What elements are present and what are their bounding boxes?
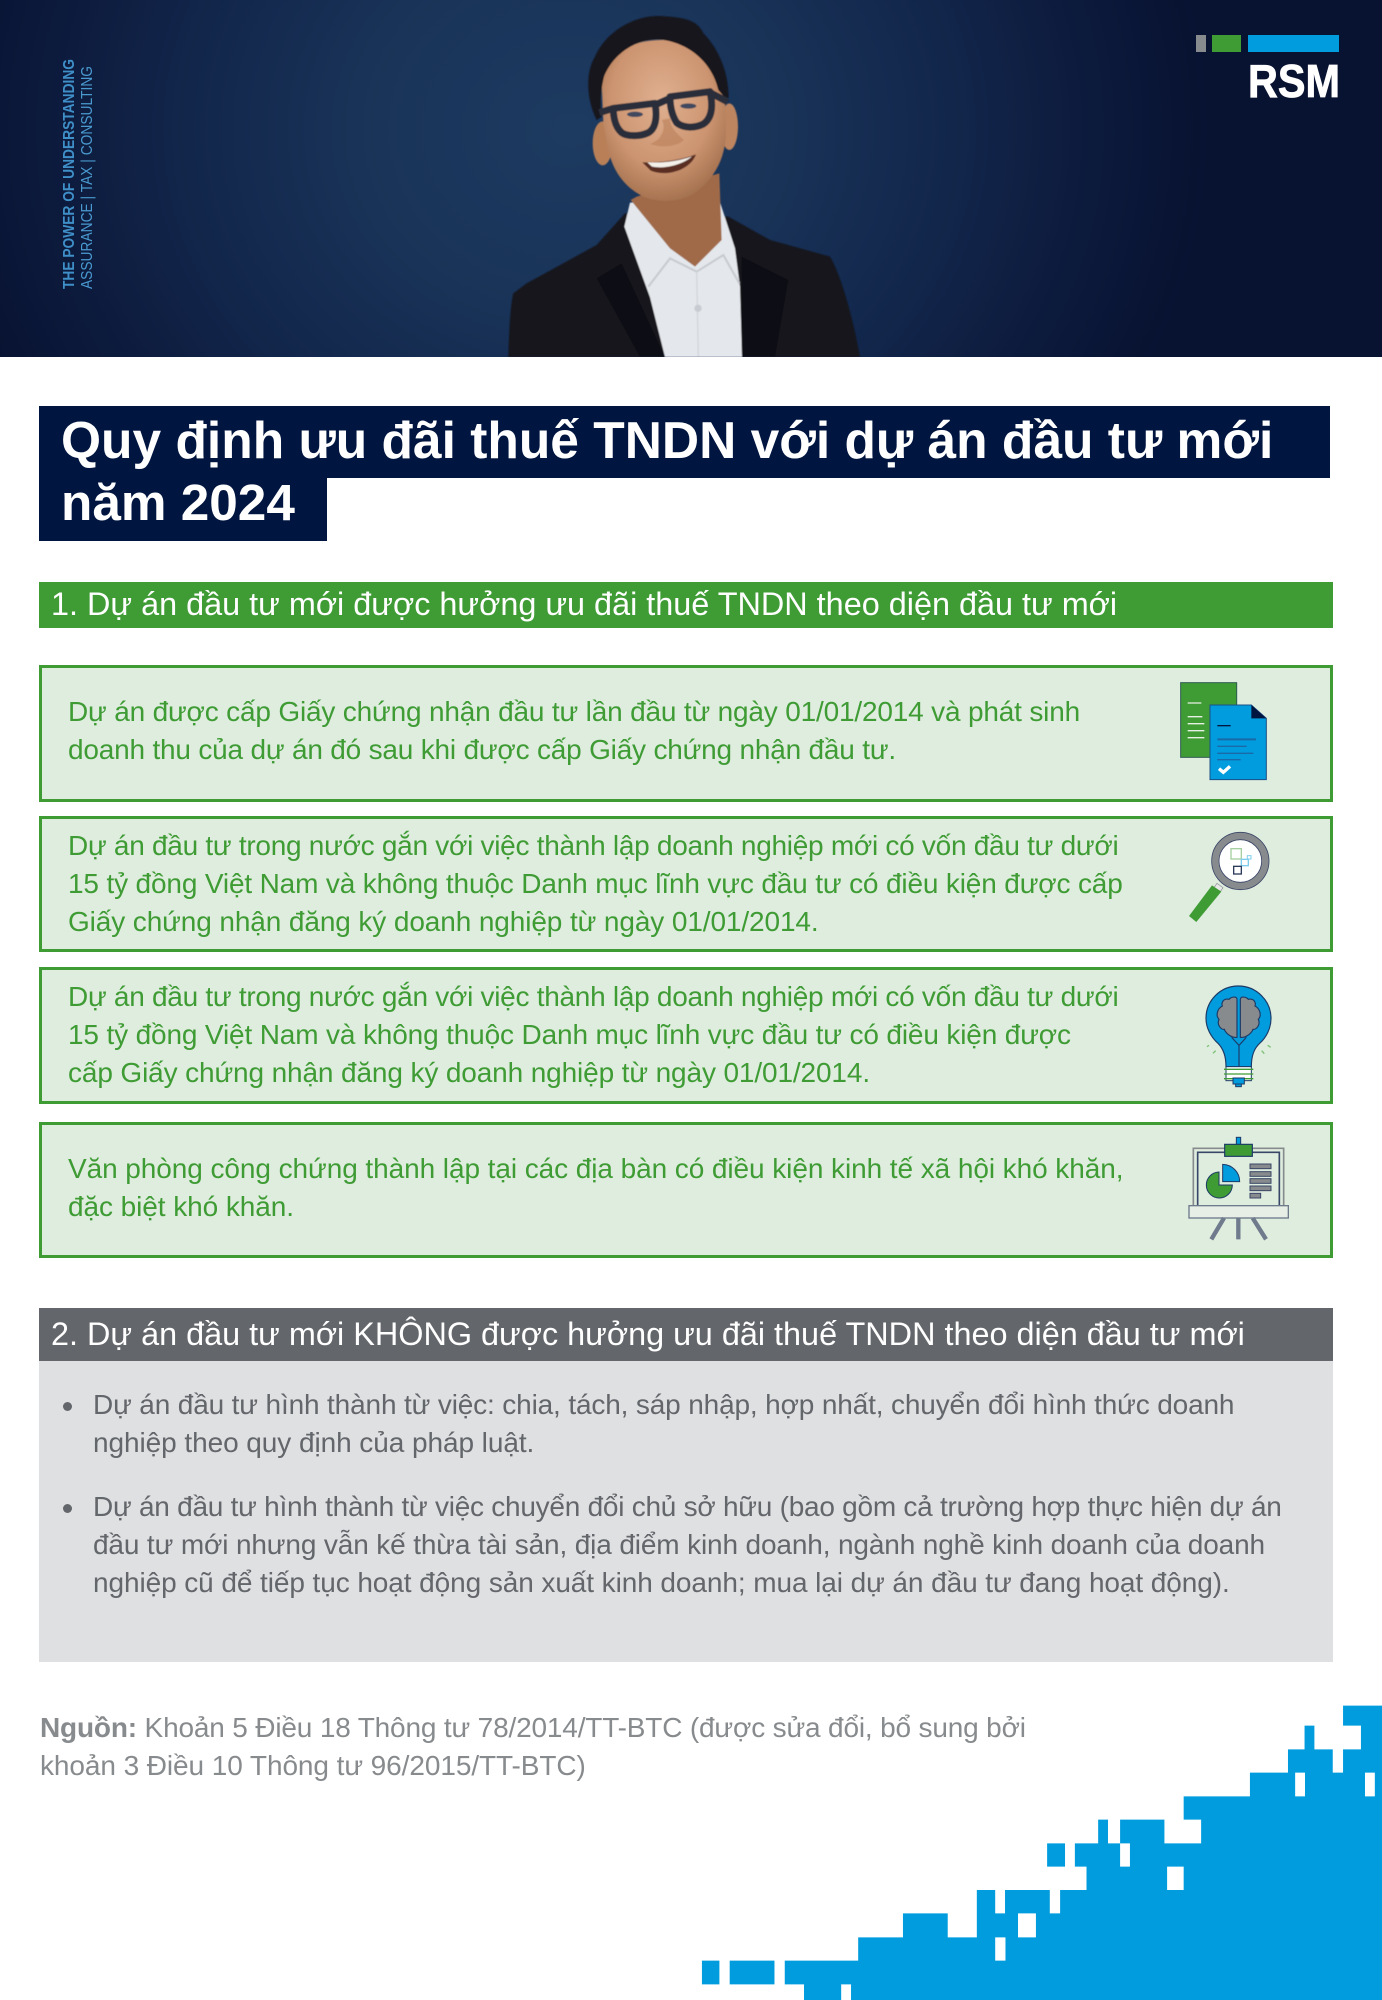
- bullet 1: [63, 1389, 1234, 1458]
- source note: Nguồn: Khoản 5 Điều 18 Thông tư 78/2014/TT-BTC (được sửa đổi, bổ sung bởi: [40, 1712, 1026, 1743]
- card 2 text: Giấy chứng nhận đăng ký doanh nghiệp từ ngày 01/01/2014.: [68, 906, 819, 937]
- portrait photo: [508, 16, 860, 357]
- icon: documents: [1180, 682, 1267, 780]
- section 1 heading: 1. Dự án đầu tư mới được hưởng ưu đãi thuế TNDN theo diện đầu tư mới: [51, 586, 1117, 622]
- source note: [40, 1712, 1026, 1781]
- icon: presentation board: [1188, 1136, 1289, 1240]
- card 3 text: [68, 981, 1118, 1088]
- card 1 text: Dự án được cấp Giấy chứng nhận đầu tư lần đầu từ ngày 01/01/2014 và phát sinh: [68, 696, 1080, 727]
- card 3 text: 15 tỷ đồng Việt Nam và không thuộc Danh mục lĩnh vực đầu tư có điều kiện được: [68, 1019, 1071, 1050]
- RSM logo: [1196, 35, 1340, 102]
- icon: magnifying glass: [1189, 832, 1270, 922]
- card 4 text: Văn phòng công chứng thành lập tại các địa bàn có điều kiện kinh tế xã hội khó khăn,: [68, 1153, 1123, 1184]
- card 2: [39, 816, 1333, 952]
- title: năm 2024: [61, 474, 295, 531]
- bullet 2: [63, 1491, 1282, 1598]
- panel: exclusions: [39, 1361, 1333, 1662]
- card 2 text: 15 tỷ đồng Việt Nam và không thuộc Danh mục lĩnh vực đầu tư có điều kiện được cấp: [68, 868, 1123, 899]
- card 3: [39, 967, 1333, 1104]
- title: Quy định ưu đãi thuế TNDN với dự án đầu tư mới: [61, 411, 1273, 469]
- card 1 text: doanh thu của dự án đó sau khi được cấp Giấy chứng nhận đầu tư.: [68, 734, 896, 765]
- section 1 heading: [39, 582, 1333, 628]
- card 3 text: cấp Giấy chứng nhận đăng ký doanh nghiệp từ ngày 01/01/2014.: [68, 1057, 870, 1088]
- card 3 text: Dự án đầu tư trong nước gắn với việc thành lập doanh nghiệp mới có vốn đầu tư dưới: [68, 981, 1118, 1012]
- bullet 1: nghiệp theo quy định của pháp luật.: [93, 1427, 534, 1458]
- card 4 text: đặc biệt khó khăn.: [68, 1191, 294, 1222]
- card 4 text: [68, 1153, 1123, 1222]
- card 1: [39, 665, 1333, 802]
- card 4: [39, 1122, 1333, 1258]
- tagline: [61, 59, 96, 289]
- decorative pixel skyline: [702, 1706, 1382, 2000]
- section 2 heading: 2. Dự án đầu tư mới KHÔNG được hưởng ưu đãi thuế TNDN theo diện đầu tư mới: [51, 1316, 1245, 1352]
- bullet 2: nghiệp cũ để tiếp tục hoạt động sản xuất kinh doanh; mua lại dự án đầu tư đang hoạt động).: [93, 1567, 1230, 1598]
- bullet 2: đầu tư mới nhưng vẫn kế thừa tài sản, địa điểm kinh doanh, ngành nghề kinh doanh của doanh: [93, 1529, 1265, 1560]
- source note: khoản 3 Điều 10 Thông tư 96/2015/TT-BTC): [40, 1750, 586, 1781]
- card 1 text: [68, 696, 1080, 765]
- card 2 text: Dự án đầu tư trong nước gắn với việc thành lập doanh nghiệp mới có vốn đầu tư dưới: [68, 830, 1118, 861]
- card 2 text: [68, 830, 1123, 937]
- bullet 1: Dự án đầu tư hình thành từ việc: chia, tách, sáp nhập, hợp nhất, chuyển đổi hình thức doanh: [93, 1389, 1234, 1420]
- section 2 heading: [39, 1308, 1333, 1361]
- bullet 2: Dự án đầu tư hình thành từ việc chuyển đổi chủ sở hữu (bao gồm cả trường hợp thực hiện dự án: [93, 1491, 1282, 1522]
- header banner: [0, 0, 1382, 357]
- icon: light bulb with brain: [1205, 985, 1272, 1088]
- title: [39, 406, 1330, 541]
